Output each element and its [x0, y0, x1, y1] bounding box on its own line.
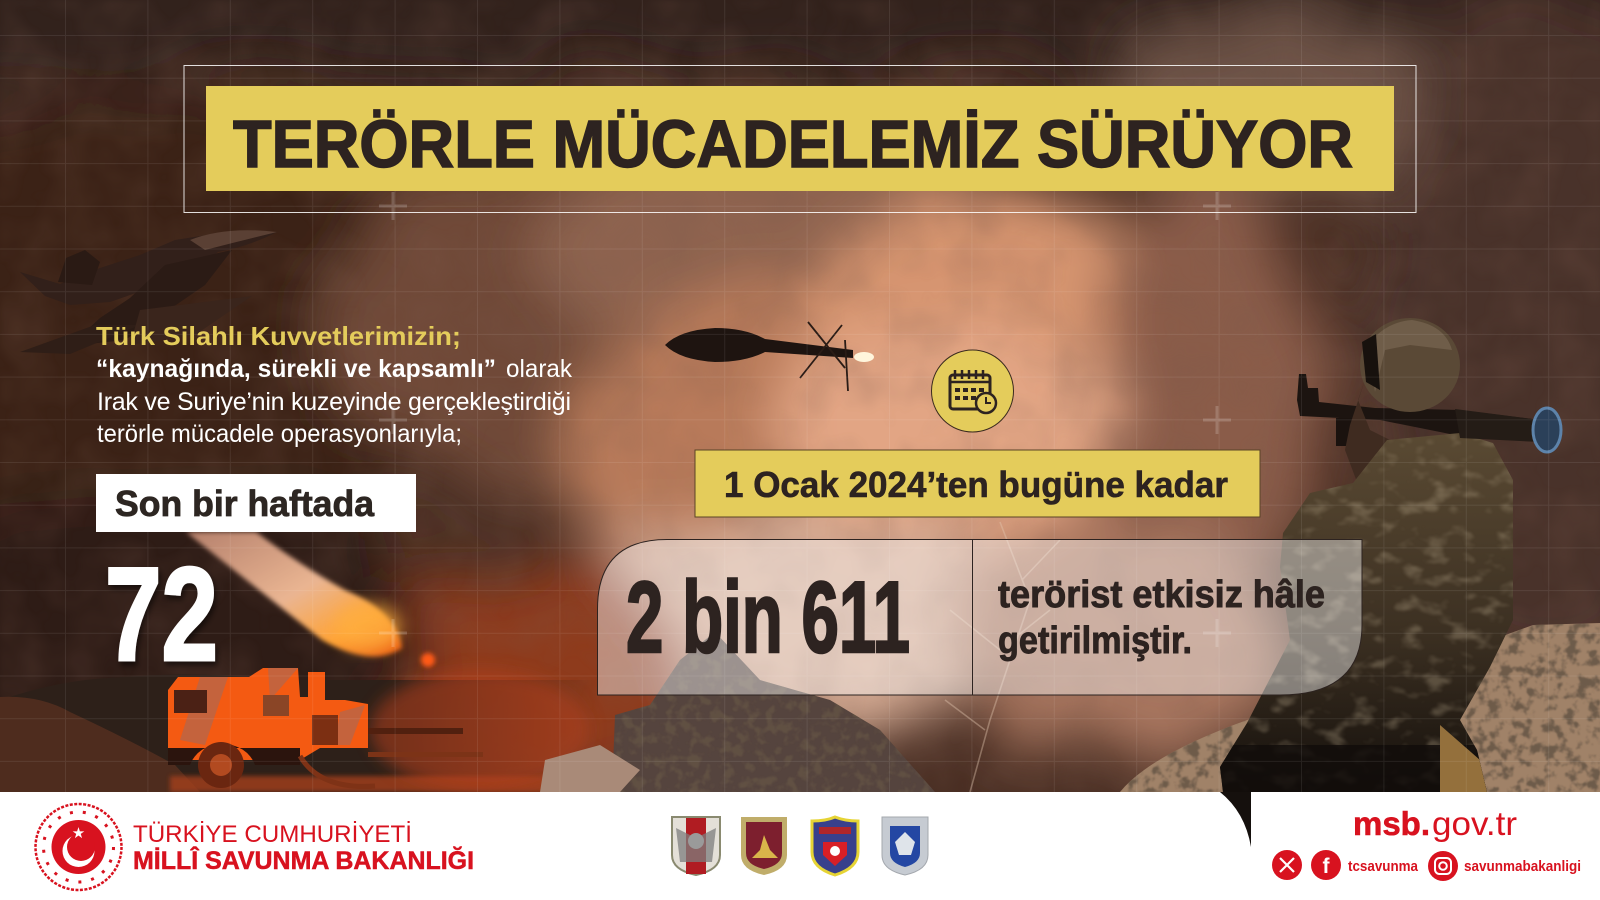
left text block	[96, 321, 572, 448]
icon: land forces shield	[741, 817, 787, 875]
weekly number: 72	[105, 541, 218, 689]
social icons	[1272, 850, 1581, 881]
total number: 2 bin 611	[626, 562, 910, 674]
result text line two: getirilmiştir.	[998, 620, 1192, 662]
icon: gendarmerie shield	[882, 817, 928, 875]
launcher muzzle	[1533, 408, 1561, 452]
soldier with launcher	[1210, 318, 1561, 795]
centre rock	[540, 625, 940, 795]
icon: general staff shield	[672, 817, 720, 875]
date banner	[695, 450, 1260, 517]
ministry name: MİLLÎ SAVUNMA BAKANLIĞI	[133, 845, 474, 875]
footer	[0, 792, 1600, 900]
icon: calendar	[932, 350, 1014, 432]
result text line one: terörist etkisiz hâle	[998, 574, 1325, 616]
title: TERÖRLE MÜCADELEMİZ SÜRÜYOR	[233, 107, 1353, 182]
title banner	[206, 86, 1394, 191]
website: gov.tr	[1432, 805, 1517, 842]
fire glow on smoke	[370, 670, 590, 790]
intro line: Irak ve Suriye’nin kuzeyinde gerçekleştirdiği	[97, 388, 571, 416]
icon: navy shield	[812, 817, 858, 875]
intro last line: terörle mücadele operasyonlarıyla;	[97, 420, 462, 448]
stat panel	[598, 540, 1362, 695]
dry branches	[945, 522, 1060, 792]
intro word: olarak	[506, 355, 572, 383]
left heading: Türk Silahlı Kuvvetlerimizin;	[96, 321, 461, 351]
rocket flame	[186, 532, 435, 667]
ministry emblem	[36, 804, 122, 890]
fighter jet	[20, 230, 277, 354]
rocket launcher truck	[168, 668, 483, 788]
social icons: savunmabakanligi	[1464, 858, 1581, 875]
social icons: tcsavunma	[1348, 858, 1419, 875]
ministry name: TÜRKİYE CUMHURİYETİ	[133, 821, 412, 848]
weekly label	[96, 474, 416, 532]
date banner: 1 Ocak 2024’ten bugüne kadar	[724, 464, 1228, 505]
ground glow	[170, 776, 670, 792]
social icons: f	[1322, 855, 1330, 878]
ministry name	[133, 821, 474, 875]
crosshair marks	[379, 192, 1231, 647]
launcher tube	[1297, 374, 1540, 442]
RPG rocket in flight	[665, 322, 874, 391]
weekly label: Son bir haftada	[115, 483, 375, 524]
right rock ledge	[1120, 620, 1600, 792]
left mound	[0, 697, 200, 792]
body	[1220, 433, 1513, 792]
launcher back	[1455, 409, 1540, 442]
helmet	[1360, 318, 1460, 412]
dusk ridge	[0, 674, 600, 792]
neck and arm	[1345, 380, 1400, 490]
ministry emblem: ★	[72, 825, 85, 842]
website: msb.	[1353, 805, 1430, 842]
intro bold phrase: “kaynağında, sürekli ve kapsamlı”	[96, 355, 496, 383]
website	[1353, 805, 1517, 842]
title frame	[184, 66, 1416, 212]
